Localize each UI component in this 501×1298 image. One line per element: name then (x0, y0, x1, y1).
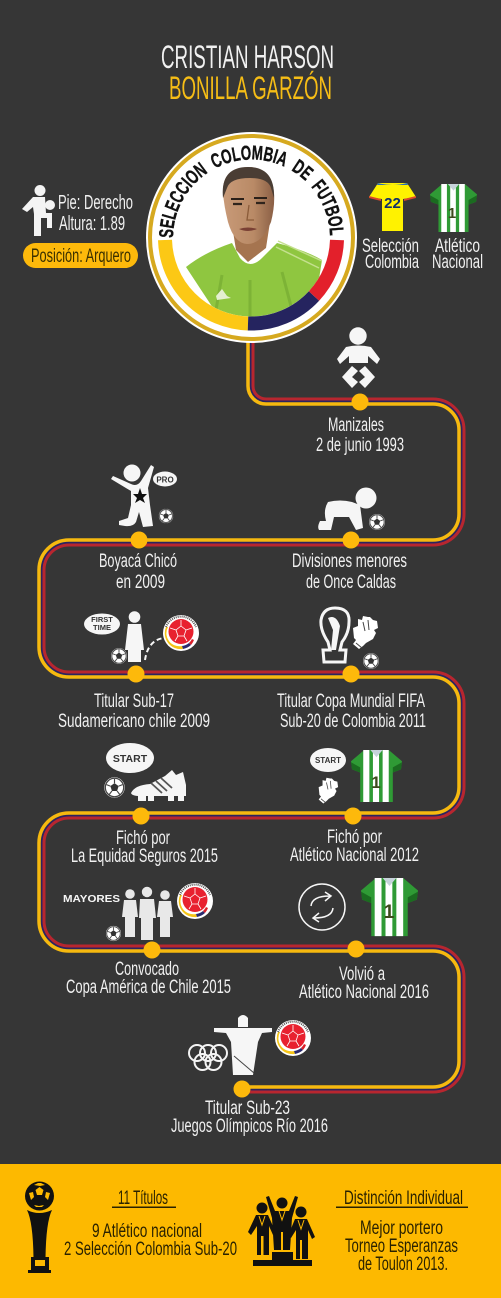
label: Boyacá Chicó: en 2009 (116, 572, 165, 593)
titles text: 2 Selección Colombia Sub-20 (64, 1239, 237, 1260)
label: Titular Copa Mundial: Titular Copa Mundial FIFA (277, 691, 425, 712)
icon: first time: TIME (93, 623, 111, 632)
icon: green shirt: 1 (448, 205, 456, 222)
label: Titular Copa Mundial (277, 691, 426, 732)
icon: start and boot: START (113, 753, 148, 765)
label: Atlético Nacional 2012 (290, 827, 419, 866)
player data (58, 192, 133, 235)
label: Juegos Olímpicos: Titular Sub-23 (205, 1098, 290, 1119)
label: Atlético Nacional 2016: Volvió a (339, 964, 385, 985)
label: Manizales: Manizales (328, 415, 384, 436)
label: Boyacá Chicó: Boyacá Chicó (99, 551, 177, 572)
icon: first time: FIRST (91, 615, 113, 624)
shirt labels: Atlético (435, 236, 480, 257)
player head (223, 167, 274, 244)
icon: player kicking ball (22, 185, 55, 236)
icon: start, glove and shirt: START (315, 756, 341, 765)
colour ring (165, 240, 337, 324)
icon: green shirt: 1 (384, 902, 395, 923)
timeline path (39, 340, 464, 1092)
icon: mayores group (63, 883, 213, 941)
title: CRISTIAN HARSON (161, 39, 334, 75)
label: La Equidad: La Equidad Seguros 2015 (71, 846, 218, 867)
label: Juegos Olímpicos (171, 1098, 328, 1137)
icon: yellow shirt (369, 183, 416, 231)
icon: pro player: PRO (156, 476, 174, 484)
label: Boyacá Chicó (99, 551, 177, 593)
titles heading (112, 1188, 176, 1209)
label: La Equidad: Fichó por (116, 828, 170, 849)
title: BONILLA GARZÓN (169, 70, 332, 106)
icon: first time (84, 611, 199, 664)
shirt labels: Colombia (365, 252, 419, 273)
titles text: 9 Atlético nacional (92, 1221, 202, 1242)
label: Divisiones menores: Divisiones menores (292, 551, 407, 572)
icon: pro player (111, 464, 177, 527)
distinction text: Mejor portero (360, 1218, 443, 1239)
icon: return arrows (299, 884, 345, 930)
icon: start and boot (104, 743, 186, 801)
icon: podium (248, 1196, 315, 1266)
label: Juegos Olímpicos: Juegos Olímpicos Río 2016 (171, 1116, 328, 1137)
label: Manizales: 2 de junio 1993 (316, 435, 404, 456)
label: Copa América (66, 959, 231, 998)
label: Atlético Nacional 2012: Fichó por (327, 827, 382, 848)
icon: crawling baby (318, 488, 385, 530)
panel: achievements (0, 1164, 501, 1298)
label: Divisiones menores: de Once Caldas (306, 572, 396, 593)
label: Manizales (316, 415, 404, 456)
position badge (23, 243, 138, 268)
icon: yellow shirt: 22 (384, 195, 401, 212)
shirt labels: Selección (362, 236, 419, 257)
label: Titular Sub-17: Sudamericano chile 2009 (58, 711, 210, 732)
icon: mayores group: MAYORES (63, 893, 120, 905)
icon: world cup and glove (321, 608, 379, 669)
position badge: Posición: Arquero (31, 246, 131, 267)
distinction text (345, 1218, 458, 1275)
icon: Christ the Redeemer, Olympic rings and crest (189, 1015, 311, 1075)
label: Atlético Nacional 2016: Atlético Nacional 2016 (299, 982, 429, 1003)
label: Titular Sub-17: Titular Sub-17 (94, 691, 174, 712)
label: Divisiones menores (292, 551, 407, 593)
label: Atlético Nacional 2016 (299, 964, 429, 1003)
icon: baby (337, 327, 380, 388)
shirt labels (362, 236, 483, 273)
icon: trophy (25, 1182, 54, 1273)
player data: Pie: Derecho (58, 192, 133, 214)
icon: start, glove and shirt: 1 (371, 773, 381, 792)
timeline dots (128, 394, 368, 1098)
player photo (186, 222, 322, 320)
titles text (64, 1221, 237, 1260)
icon: green shirt (430, 184, 477, 232)
distinction text: de Toulon 2013. (358, 1254, 448, 1275)
label: La Equidad (71, 828, 218, 867)
icon: green shirt (361, 878, 418, 936)
badge lettering: SELECCION COLOMBIA DE FUTBOL (159, 145, 344, 238)
icon: start, glove and shirt (310, 748, 402, 803)
label: Titular Sub-17 (58, 691, 210, 732)
label: Copa América: Copa América de Chile 2015 (66, 977, 231, 998)
titles heading: 11 Títulos (118, 1188, 168, 1209)
portrait badge (146, 132, 357, 343)
label: Titular Copa Mundial: Sub-20 de Colombia 2011 (280, 711, 426, 732)
label: Atlético Nacional 2012: Atlético Nacional 2012 (290, 845, 419, 866)
label: Copa América: Convocado (115, 959, 179, 980)
player data: Altura: 1.89 (59, 213, 125, 235)
title (161, 39, 334, 106)
